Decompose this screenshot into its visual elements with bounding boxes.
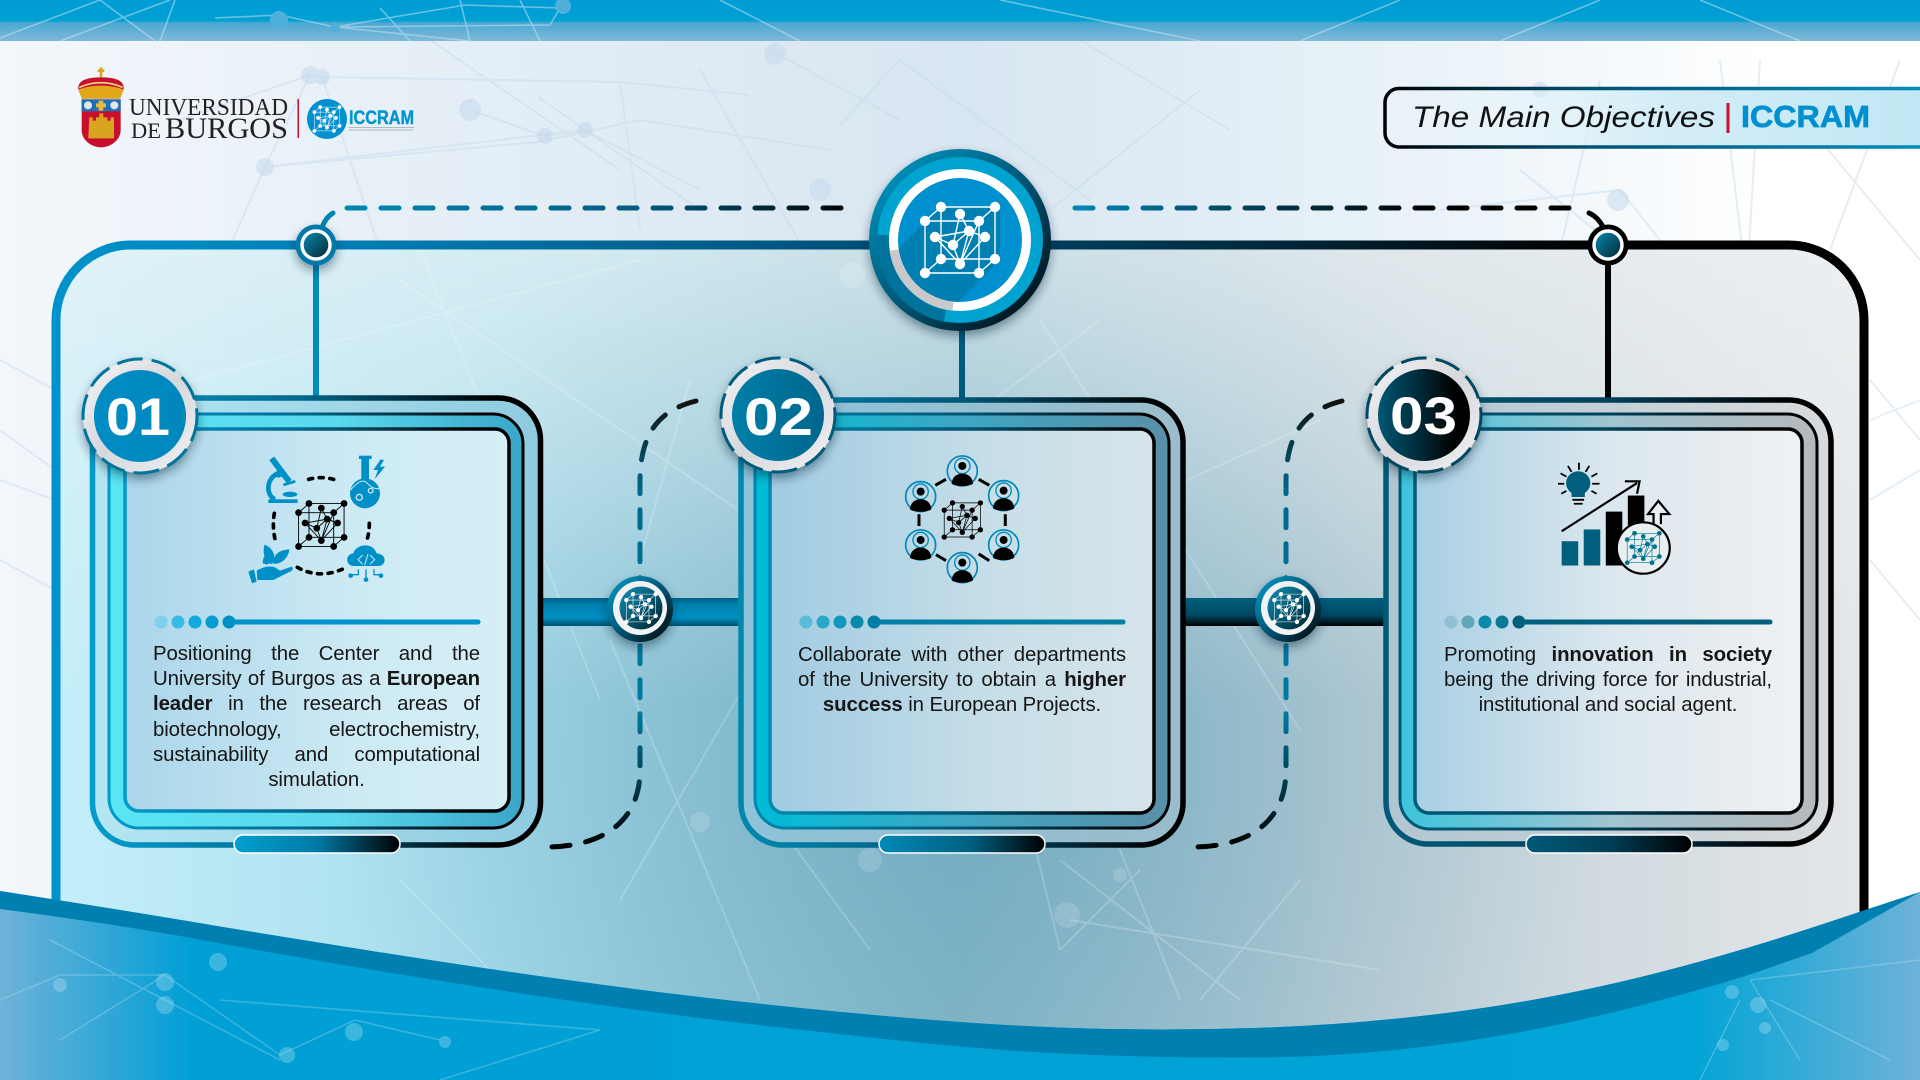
- dashed ring: [273, 478, 369, 574]
- logo: ICCRAM: ICCRAM: [349, 108, 414, 129]
- connector node: cards 1 to 2: [607, 576, 673, 642]
- logo: ICCRAM: [307, 99, 414, 139]
- panel: card 2: [741, 400, 1183, 853]
- divider: card 3: [1444, 616, 1770, 628]
- divider: card 2: [800, 616, 1123, 628]
- up arrow: [1648, 501, 1669, 524]
- title box: [1385, 88, 1920, 147]
- text: objective 1: [153, 643, 480, 791]
- dashed connector: cards 2 to 3: [1192, 401, 1342, 847]
- microscope: [268, 458, 298, 503]
- badge: 02: [721, 358, 835, 472]
- vertical link: card 1: [313, 245, 319, 398]
- text: objective 2: success in European Projects.: [823, 694, 1101, 716]
- badge: 02: 02: [744, 388, 813, 447]
- logo: university name: BURGOS: [165, 112, 288, 145]
- panel outline: [56, 245, 1864, 1080]
- top band: [0, 0, 1920, 41]
- light bulb: [1558, 463, 1600, 504]
- badge: 01: [83, 359, 197, 473]
- connector node: cards 2 to 3: [1255, 576, 1321, 642]
- title box: ICCRAM: [1741, 99, 1870, 134]
- divider: card 1: [154, 616, 478, 628]
- text: objective 3: [1444, 644, 1772, 716]
- connector bar: cards 2 to 3: [1183, 598, 1387, 626]
- central emblem: [869, 149, 1051, 331]
- badge: 03: 03: [1390, 387, 1457, 446]
- dashed connector: cards 1 to 2: [545, 401, 696, 847]
- text: objective 3: Promoting innovation in society: [1444, 644, 1772, 666]
- logo: university name: DE: [131, 118, 161, 143]
- hand and leaves: [248, 545, 293, 583]
- text: objective 1: biotechnology, electrochemistry,: [153, 719, 480, 741]
- node: left: [296, 224, 336, 266]
- text: objective 2: [798, 644, 1126, 716]
- connector bar: cards 1 to 2: [540, 598, 742, 626]
- logo: university name: [129, 95, 288, 145]
- dashed link: left: [322, 208, 848, 228]
- vertical link: card 2: [959, 320, 965, 400]
- bottom wave: [0, 891, 1920, 1080]
- badge: 03: [1367, 358, 1481, 472]
- logo: Universidad de Burgos shield: [78, 67, 124, 147]
- text: objective 1: University of Burgos as a European: [153, 668, 480, 690]
- icon: collaboration network: [906, 456, 1019, 583]
- dashed link: right: [1075, 208, 1603, 227]
- panel: card 3: [1386, 400, 1831, 853]
- card 1 bottom pill: [234, 835, 400, 853]
- logo: university name: UNIVERSIDAD: [129, 95, 288, 121]
- cloud computing: [347, 545, 385, 582]
- bars: [1562, 541, 1578, 566]
- text: objective 2: of the University to obtain a higher: [798, 669, 1126, 691]
- crystal badge: [1617, 522, 1670, 574]
- flask: [350, 456, 385, 508]
- card 3 bottom pill: [1526, 835, 1692, 853]
- text: objective 1: sustainability and computational: [153, 744, 480, 766]
- crystal: [295, 500, 347, 550]
- panel: main background panel: [56, 245, 1864, 1080]
- background network: [0, 40, 1920, 620]
- icon: research areas cycle: [248, 456, 385, 583]
- badge: 01: 01: [106, 388, 170, 447]
- text: objective 2: Collaborate with other departments: [798, 644, 1126, 666]
- panel: card 1: [92, 398, 540, 853]
- title box: The Main Objectives: [1412, 101, 1715, 134]
- icon: innovation growth chart: [1558, 463, 1670, 574]
- vertical link: card 3: [1605, 245, 1611, 400]
- logo: divider: [298, 99, 299, 138]
- growth arrow: [1562, 481, 1640, 531]
- text: objective 1: leader in the research areas of: [153, 693, 480, 715]
- node: right: [1588, 224, 1628, 266]
- text: objective 1: Positioning the Center and the: [153, 643, 480, 665]
- card 2 bottom pill: [879, 835, 1045, 853]
- text: objective 3: being the driving force for industrial,: [1444, 669, 1772, 691]
- text: objective 1: simulation.: [268, 769, 365, 791]
- text: objective 3: institutional and social agent.: [1479, 694, 1737, 716]
